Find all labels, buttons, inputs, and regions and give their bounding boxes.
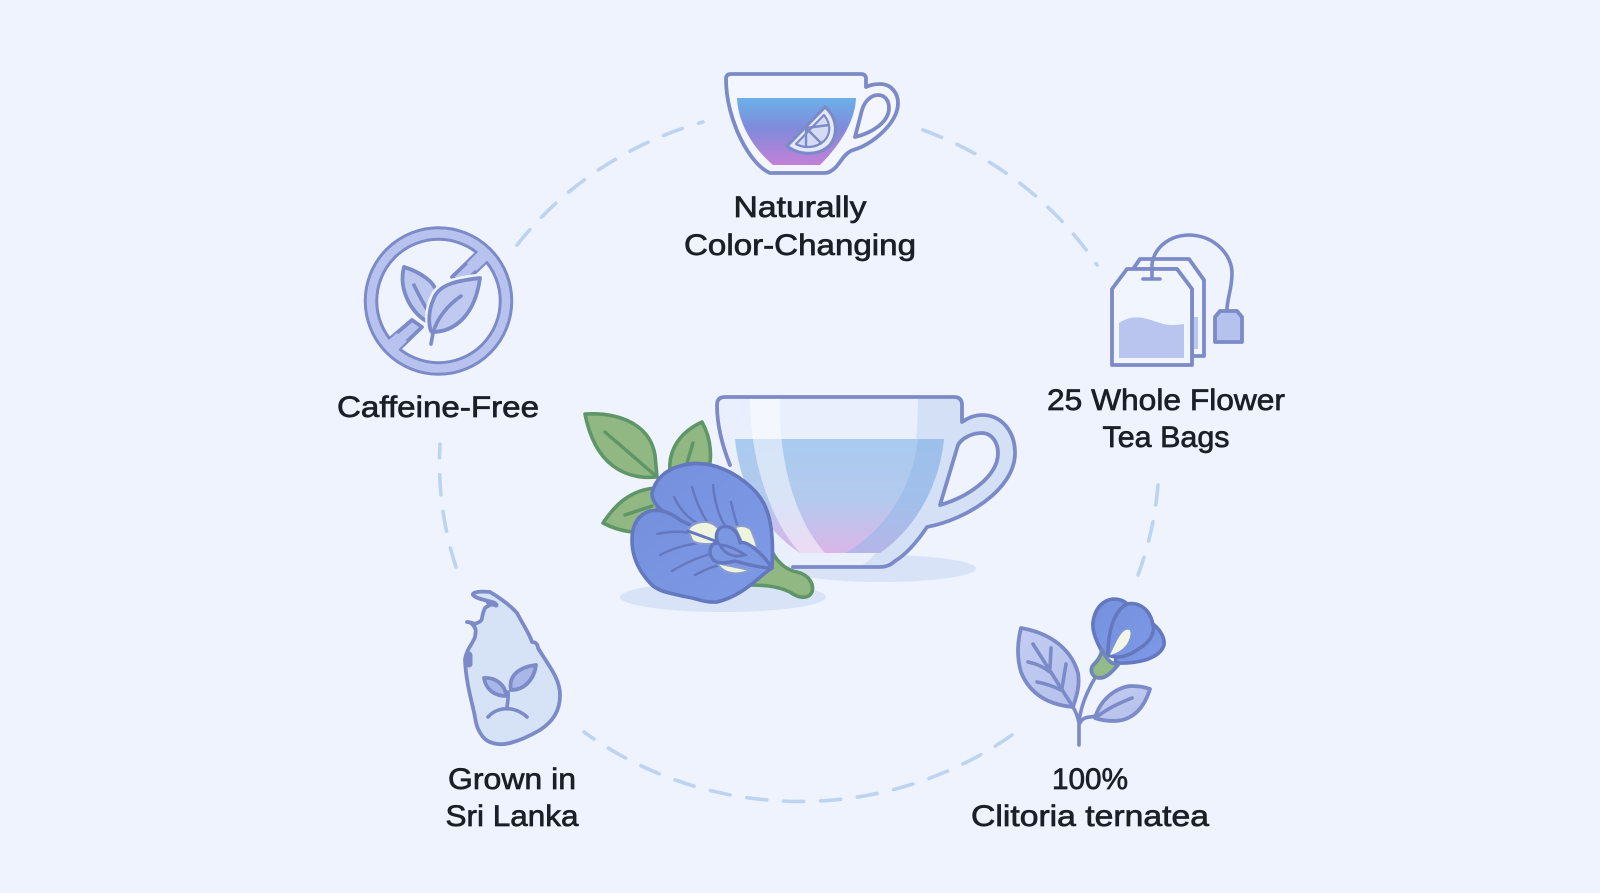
feature: grown in sri lanka xyxy=(446,592,579,833)
flower stem xyxy=(745,547,812,597)
icon: tea bags xyxy=(1112,235,1242,365)
lemon slice xyxy=(787,107,835,153)
feature: naturally color-changing xyxy=(684,74,916,262)
tag xyxy=(1215,311,1242,342)
glass cup xyxy=(717,397,1015,567)
sprout xyxy=(484,665,536,717)
flower leaves xyxy=(585,414,710,532)
central illustration: glass cup with butterfly pea flower xyxy=(585,397,1015,612)
feature: 25 whole flower tea bags xyxy=(1047,235,1285,454)
icon: color-changing tea cup xyxy=(726,74,898,173)
leaf small xyxy=(1095,686,1150,721)
calyx xyxy=(1091,650,1118,678)
label: 25 Whole Flower xyxy=(1047,384,1285,417)
feature: 100% clitoria ternatea xyxy=(971,599,1210,833)
icon: flower sprig xyxy=(1018,599,1164,745)
butterfly pea flower xyxy=(632,463,773,602)
label: Grown in xyxy=(448,763,576,796)
dashed ring connecting features xyxy=(439,122,1158,801)
feature: caffeine-free xyxy=(337,234,539,424)
feature: 25 whole flower tea bags: Tea Bags xyxy=(1102,421,1230,454)
icon: crossed-out leaves xyxy=(371,234,506,368)
flower shadow xyxy=(620,582,826,612)
cup shadow xyxy=(786,555,976,582)
label: 100% xyxy=(1052,763,1128,796)
feature: grown in sri lanka: Sri Lanka xyxy=(446,800,579,833)
icon: sri lanka map with sprout xyxy=(465,592,560,744)
flower bud xyxy=(1093,599,1164,663)
label: Naturally xyxy=(734,191,867,224)
feature: 100% clitoria ternatea: Clitoria ternatea xyxy=(971,800,1210,833)
feature: naturally color-changing: Color-Changing xyxy=(684,229,916,262)
label: Caffeine-Free xyxy=(337,391,539,424)
leaf large xyxy=(1018,628,1079,707)
